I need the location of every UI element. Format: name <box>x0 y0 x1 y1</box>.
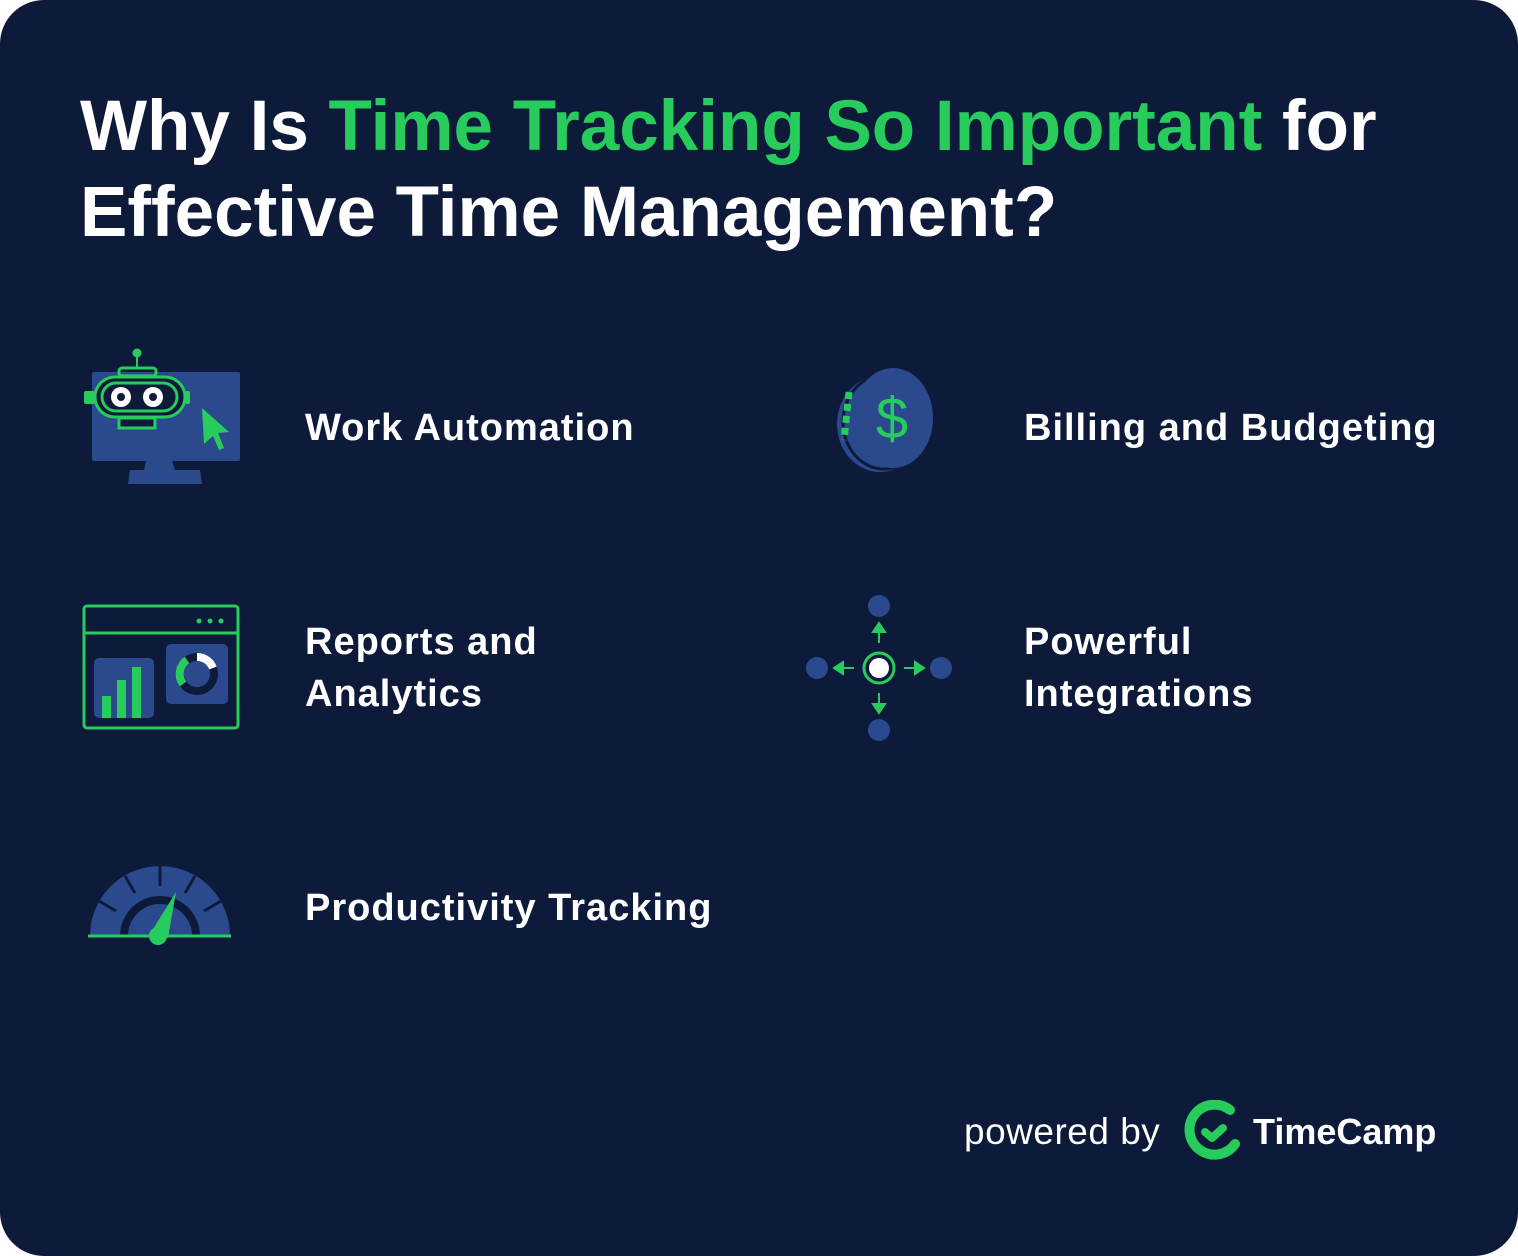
label: reports: Analytics <box>305 673 483 715</box>
icon: robot monitor <box>84 348 240 484</box>
label: reports: Reports and <box>305 621 538 663</box>
icon: integrations <box>806 595 952 741</box>
icon: coin <box>837 368 933 472</box>
logo: TimeCamp <box>1184 1100 1436 1160</box>
icon: reports window <box>82 604 240 730</box>
footer: powered by <box>964 1100 1436 1160</box>
logo: TimeCamp: TimeCamp <box>1253 1111 1436 1152</box>
label: work automation: Work Automation <box>305 407 635 449</box>
title: Why Is Time Tracking So Important for <box>80 87 1377 166</box>
icon: gauge <box>88 866 231 945</box>
title <box>80 87 1377 252</box>
label: integrations: Integrations <box>1024 673 1253 715</box>
label: integrations <box>1024 621 1253 715</box>
label: productivity: Productivity Tracking <box>305 887 712 929</box>
label: billing: Billing and Budgeting <box>1024 407 1438 449</box>
title: Effective Time Management? <box>80 173 1057 252</box>
label: reports <box>305 621 538 715</box>
text: powered by: powered by <box>964 1111 1160 1152</box>
label: integrations: Powerful <box>1024 621 1192 663</box>
icon: coin: $ <box>876 386 908 451</box>
